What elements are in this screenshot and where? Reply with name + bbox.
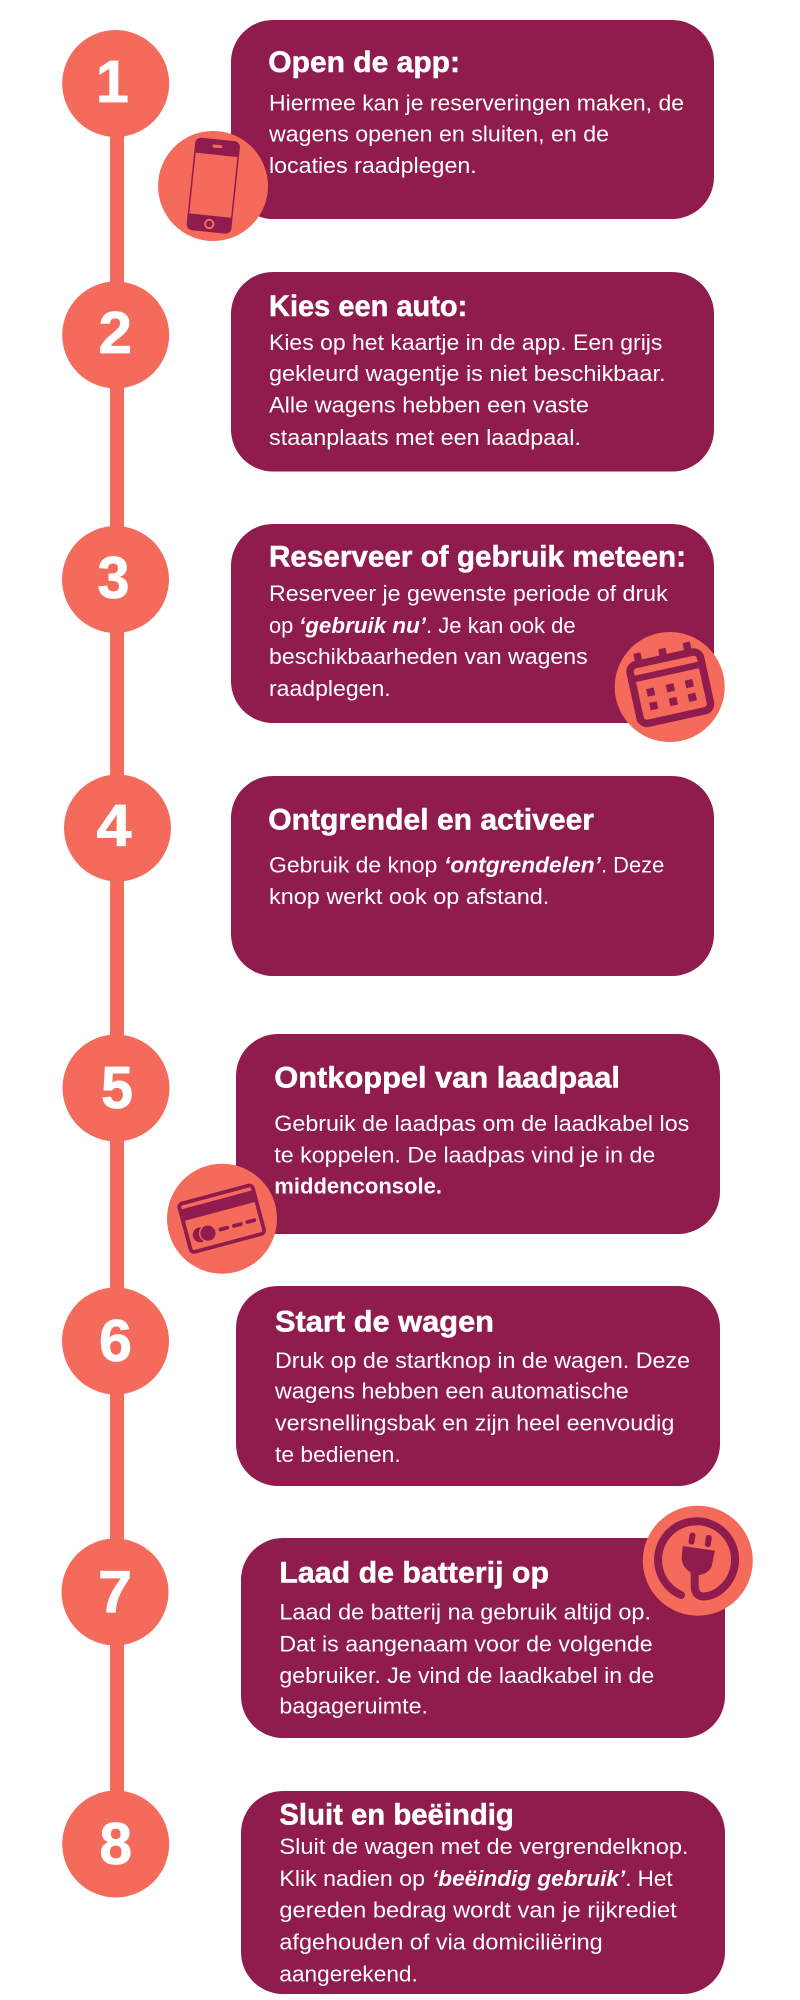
text block: step 3: beschikbaarheden van wagens: [269, 644, 588, 669]
icon: charging plug: [643, 1506, 753, 1616]
text block: step 1: locaties raadplegen.: [269, 153, 477, 178]
panel: step 7 laad de batterij op: [241, 1538, 725, 1738]
text block: step 7: gebruiker. Je vind de laadkabel in de: [279, 1663, 654, 1688]
text block: step 8: Sluit de wagen met de vergrendelknop.: [279, 1834, 688, 1859]
panel: step 4 ontgrendel en activeer: [231, 776, 714, 976]
panel: step 1 open de app: [231, 20, 714, 219]
text block: step 5: [274, 1111, 689, 1198]
text block: step 6: wagens hebben een automatische: [274, 1379, 629, 1404]
text block: step 4: Gebruik de knop: [269, 852, 437, 877]
text block: step 1: wagens openen en sluiten, en de: [268, 122, 609, 147]
step 2 number circle: 2: [98, 300, 132, 366]
timeline connector line: [110, 130, 124, 1800]
text block: step 6: te bedienen.: [275, 1442, 401, 1467]
text block: step 1: Hiermee kan je reserveringen maken, de: [269, 91, 684, 116]
step 1 number circle: 1: [96, 49, 129, 115]
step 6 number circle: 6: [99, 1308, 132, 1374]
icon: calendar: [615, 632, 725, 742]
text block: step 7: [279, 1599, 654, 1719]
text block: step 7: bagageruimte.: [279, 1694, 428, 1719]
step 8 number circle: 8: [100, 1811, 132, 1877]
step 6 number circle: [62, 1288, 169, 1394]
step 3 number circle: [62, 526, 169, 633]
text block: step 4: . Deze: [601, 852, 664, 877]
heading: step 8: Sluit en beëindig: [279, 1798, 514, 1831]
step 4 number circle: 4: [96, 793, 132, 859]
text block: step 4: knop werkt ook op afstand.: [269, 884, 549, 909]
heading: step 6: Start de wagen: [275, 1305, 494, 1338]
text block: step 2: [269, 330, 666, 450]
text block: step 2: Kies op het kaartje in de app. Een grijs: [269, 330, 662, 355]
text block: step 7: Laad de batterij na gebruik altijd op.: [279, 1599, 651, 1624]
text block: step 3: ‘gebruik nu’: [299, 613, 427, 638]
text block: step 8: [279, 1834, 688, 1987]
text block: step 4: [269, 852, 664, 909]
step 3 number circle: 3: [98, 545, 130, 611]
step 7 number circle: [62, 1538, 168, 1646]
text block: step 8: afgehouden of via domiciliëring: [279, 1930, 603, 1955]
heading: step 5: Ontkoppel van laadpaal: [274, 1061, 620, 1094]
step 5 number circle: 5: [101, 1055, 133, 1121]
heading: step 2: Kies een auto:: [269, 290, 467, 323]
text block: step 3: raadplegen.: [269, 676, 391, 701]
panel: step 8 sluit en beeindig: [241, 1791, 725, 1994]
step 8 number circle: [62, 1790, 169, 1898]
step 4 number circle: [64, 774, 171, 882]
text block: step 3: op: [269, 613, 293, 638]
heading: step 4: Ontgrendel en activeer: [268, 803, 594, 836]
step 2 number circle: [62, 282, 169, 388]
heading: step 1: Open de app:: [268, 46, 460, 79]
text block: step 1: [268, 91, 684, 178]
panel: step 3 reserveer of gebruik meteen: [231, 524, 714, 723]
step 5 number circle: [62, 1034, 170, 1142]
heading: step 7: Laad de batterij op: [279, 1557, 549, 1590]
text block: step 5: Gebruik de laadpas om de laadkabel los: [274, 1111, 689, 1136]
icon: charge card: [167, 1164, 277, 1274]
text block: step 8: . Het: [625, 1866, 673, 1891]
text block: step 8: aangerekend.: [279, 1962, 418, 1987]
text block: step 8: gereden bedrag wordt van je rijkrediet: [279, 1898, 677, 1923]
text block: step 6: [274, 1348, 690, 1467]
step 7 number circle: 7: [98, 1559, 132, 1625]
icon: smartphone: [158, 131, 268, 241]
text block: step 5: middenconsole.: [274, 1173, 442, 1198]
text block: step 4: ‘ontgrendelen’: [444, 852, 602, 877]
text block: step 8: Klik nadien op: [279, 1866, 425, 1891]
panel: step 2 kies een auto: [231, 272, 714, 472]
text block: step 2: Alle wagens hebben een vaste: [269, 393, 589, 418]
text block: step 3: Reserveer je gewenste periode of druk: [269, 581, 668, 606]
panel: step 5 ontkoppel van laadpaal: [236, 1034, 720, 1234]
heading: step 3: Reserveer of gebruik meteen:: [269, 541, 686, 574]
text block: step 2: staanplaats met een laadpaal.: [269, 425, 581, 450]
text block: step 7: Dat is aangenaam voor de volgende: [279, 1631, 653, 1656]
text block: step 3: [269, 581, 668, 701]
text block: step 2: gekleurd wagentje is niet beschikbaar.: [269, 361, 666, 386]
step 1 number circle: [62, 30, 169, 137]
panel: step 6 start de wagen: [236, 1286, 720, 1486]
text block: step 8: ‘beëindig gebruik’: [432, 1866, 626, 1891]
text block: step 6: versnellingsbak en zijn heel eenvoudig: [275, 1410, 674, 1435]
text block: step 3: . Je kan ook de: [426, 613, 576, 638]
text block: step 5: te koppelen. De laadpas vind je in de: [274, 1142, 655, 1167]
text block: step 6: Druk op de startknop in de wagen. Deze: [275, 1348, 690, 1373]
